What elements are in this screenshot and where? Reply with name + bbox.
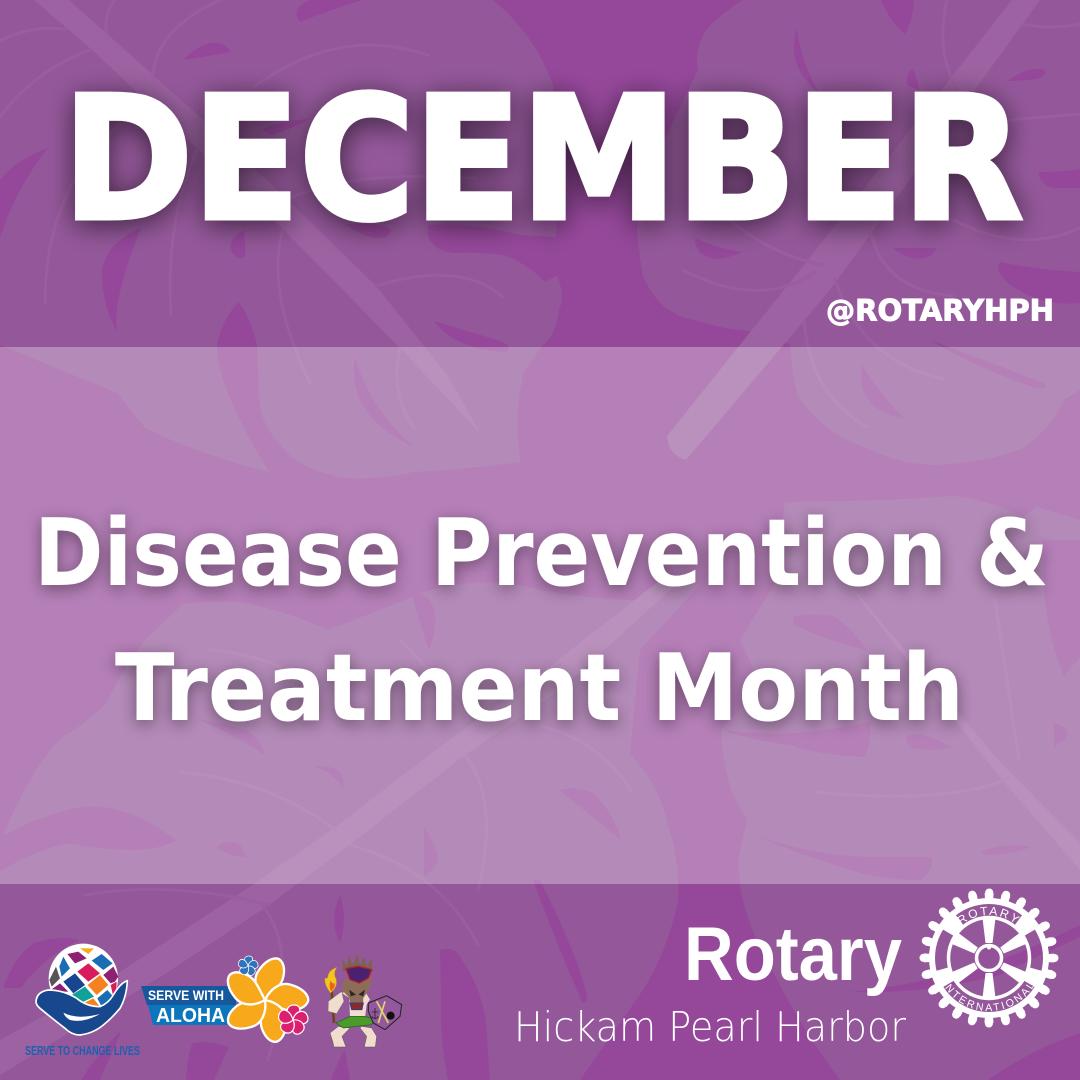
handle: @ROTARYHPH: @ROTARYHPH xyxy=(826,294,1054,328)
heading: Disease Prevention & Treatment Month: Treatment Month xyxy=(115,634,964,742)
icon: Rotary wheel: ROTARY xyxy=(958,906,1020,924)
icon: Rotary wheel xyxy=(920,888,1058,1028)
Rotary wordmark: Rotary xyxy=(684,912,902,997)
logo: serve to change lives xyxy=(25,944,140,1058)
icon: pink flower xyxy=(277,1005,309,1036)
middle translucent band xyxy=(0,347,1080,884)
icon: globe and hand xyxy=(36,944,127,1035)
icon: Rotary wheel: INTERNATIONAL xyxy=(945,984,1034,1011)
banner xyxy=(141,986,240,1027)
icon: plumeria xyxy=(222,957,310,1045)
banner: ALOHA xyxy=(156,1005,225,1027)
heading: Disease Prevention & Treatment Month xyxy=(34,499,1049,742)
banner: SERVE WITH xyxy=(148,988,224,1003)
club name: Hickam Pearl Harbor xyxy=(514,1003,906,1051)
label: serve to change lives: SERVE TO CHANGE LIVES xyxy=(25,1043,140,1058)
logo: serve with aloha xyxy=(141,956,310,1045)
icon: blue flower xyxy=(237,956,259,977)
title: DECEMBER: DECEMBER xyxy=(63,61,1023,259)
icon: tiki warrior xyxy=(325,954,402,1047)
